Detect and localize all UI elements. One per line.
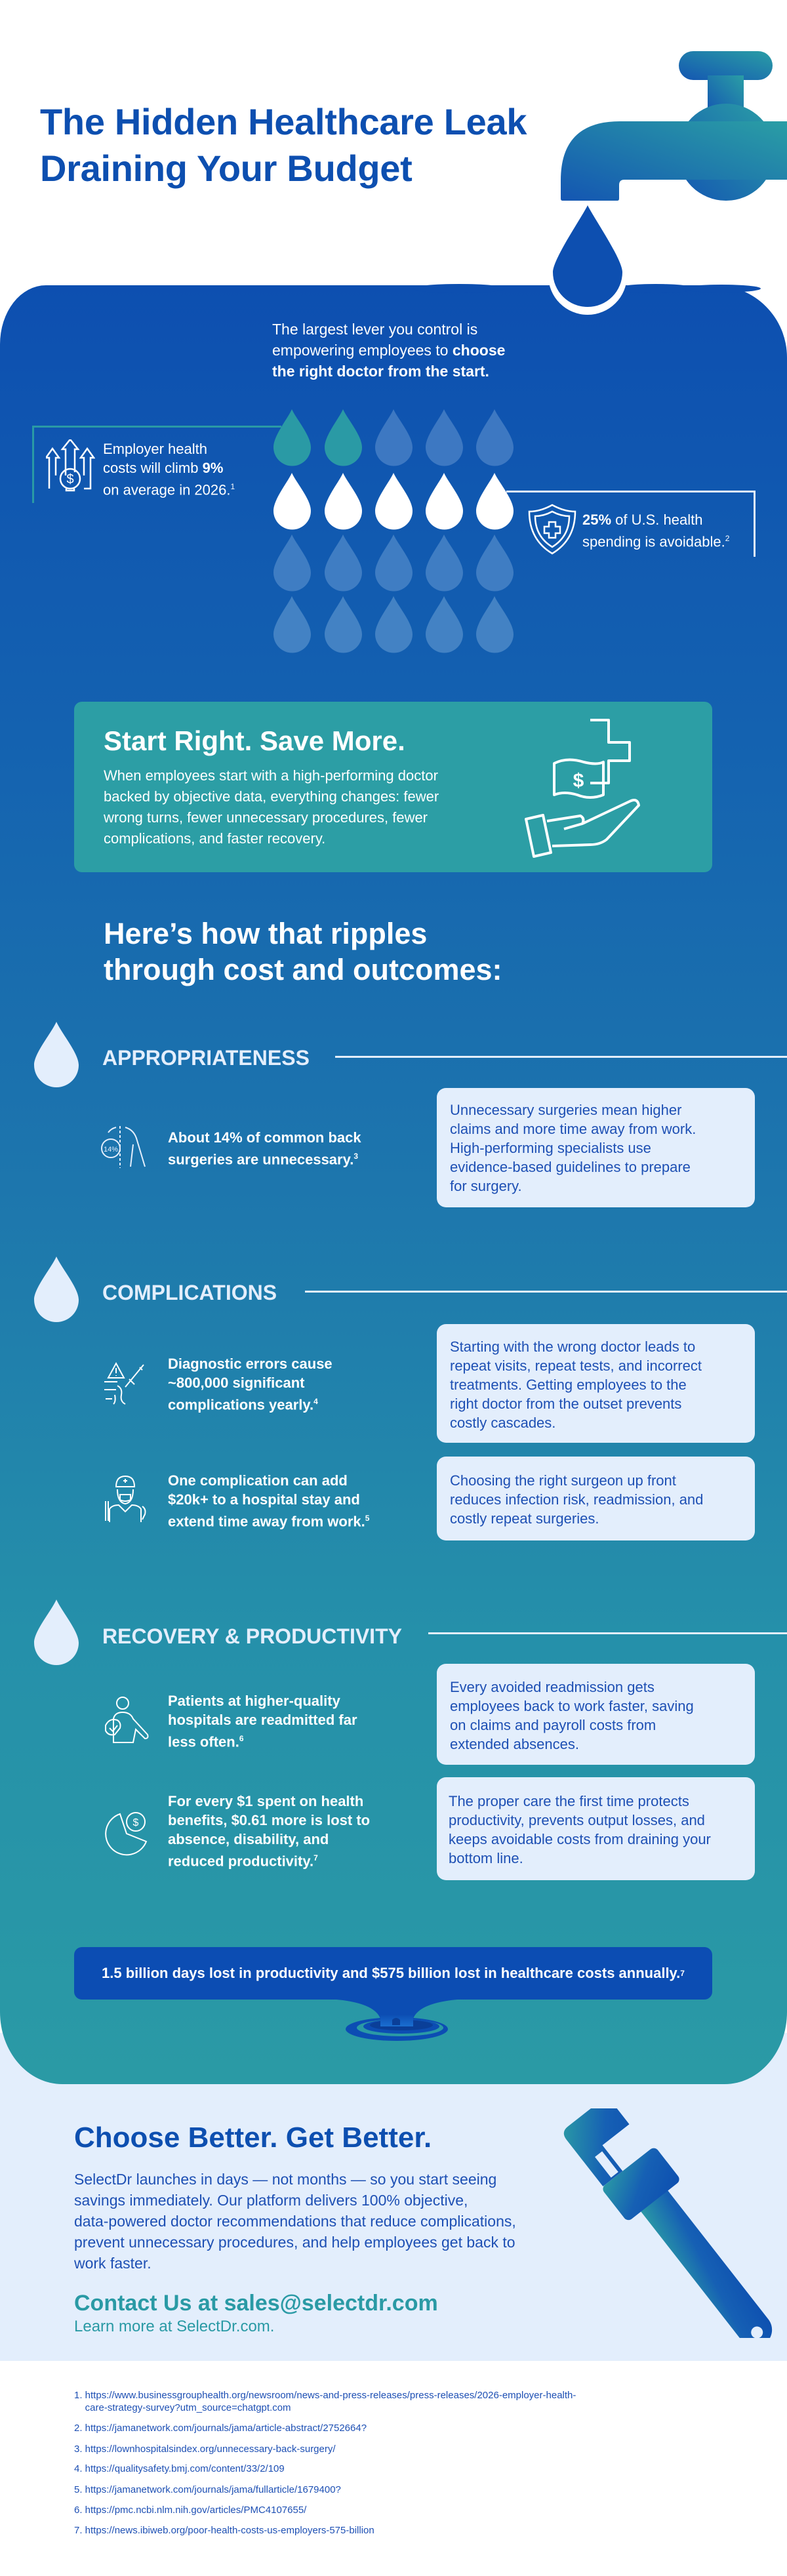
contact: Contact Us at sales@selectdr.com (74, 2291, 438, 2316)
text: One complication can add (168, 1472, 348, 1489)
heading: APPROPRIATENESS (102, 1046, 310, 1070)
text: Patients at higher-quality (168, 1693, 340, 1709)
box: readmission: on claims and payroll costs from (450, 1717, 656, 1733)
icon: clock with dollar (105, 1812, 147, 1856)
text: extend time away from work.5 (168, 1513, 369, 1529)
text (103, 441, 235, 498)
text (582, 512, 729, 550)
text: absence, disability, and (168, 1831, 329, 1847)
icon: hand with money (525, 719, 640, 858)
body: selectdr: prevent unnecessary procedures, and help employees get back to (74, 2234, 515, 2251)
box: surgeon: costly repeat surgeries. (450, 1510, 599, 1527)
banner: annual losses: 1.5 billion days lost in productivity and $575 billion lost in healthcare costs annually. (102, 1965, 680, 1981)
text: For every $1 spent on health (168, 1793, 363, 1809)
icon: wrench (564, 2108, 773, 2338)
body: complications, and faster recovery. (104, 830, 325, 847)
blue panel (0, 285, 787, 2084)
lever text (272, 321, 505, 380)
text: hospitals are readmitted far (168, 1712, 357, 1728)
stat: back surgeries (101, 1126, 361, 1168)
body: backed by objective data, everything changes: fewer (104, 788, 439, 805)
box: diagnostic: repeat visits, repeat tests, and incorrect (450, 1358, 702, 1374)
body: selectdr: work faster. (74, 2255, 151, 2272)
box: productivity: keeps avoidable costs from draining your (449, 1831, 711, 1847)
body: selectdr: data-powered doctor recommendations that reduce complications, (74, 2213, 516, 2230)
icon: clock with dollar: $ (133, 1817, 139, 1828)
text: Employer health (103, 441, 207, 457)
text (168, 1129, 361, 1167)
icon: drain (337, 2000, 457, 2041)
text: less often.6 (168, 1733, 244, 1750)
text: surgeries are unnecessary.3 (168, 1151, 358, 1167)
section: recovery (34, 1600, 787, 1665)
heading: ripples (104, 917, 502, 986)
box: productivity: The proper care the first time protects (449, 1793, 689, 1809)
text (168, 1472, 370, 1529)
icon: back (101, 1126, 146, 1168)
body: When employees start with a high-performing doctor (104, 767, 438, 784)
icon: back: 14% (104, 1146, 118, 1154)
icon: patient (105, 1697, 148, 1743)
heading: COMPLICATIONS (102, 1281, 277, 1304)
section: complications (34, 1257, 787, 1322)
references: 7. https://news.ibiweb.org/poor-health-costs-us-employers-575-billion (74, 2525, 374, 2536)
learn more: Learn more at SelectDr.com. (74, 2318, 274, 2335)
box: diagnostic (437, 1324, 755, 1443)
heading: ripples: Here’s how that ripples (104, 917, 427, 950)
lever text: empowering employees to choose (272, 342, 505, 359)
icon: drop (34, 1600, 79, 1665)
references: 6. https://pmc.ncbi.nlm.nih.gov/articles/PMC4107655/ (74, 2505, 306, 2516)
text: spending is avoidable.2 (582, 533, 729, 550)
banner: annual losses: 7 (680, 1969, 685, 1978)
text (168, 1693, 357, 1750)
text: benefits, $0.61 more is lost to (168, 1812, 370, 1828)
references (74, 2390, 576, 2536)
title: Draining Your Budget (40, 148, 412, 189)
box: readmission (437, 1664, 755, 1765)
box: productivity (437, 1777, 755, 1880)
box: appropriateness: Unnecessary surgeries mean higher (450, 1102, 681, 1118)
body: selectdr (74, 2171, 516, 2272)
box: appropriateness: for surgery. (450, 1178, 522, 1194)
box: surgeon (437, 1457, 755, 1540)
faucet and drip (426, 51, 787, 315)
box: readmission: employees back to work faster, saving (450, 1698, 694, 1714)
box: appropriateness: High-performing specialists use (450, 1140, 651, 1156)
stat: diagnostic errors (104, 1356, 333, 1413)
drops grid (273, 409, 514, 653)
box: readmission: extended absences. (450, 1736, 579, 1752)
text: reduced productivity.7 (168, 1853, 318, 1869)
lever text: the right doctor from the start. (272, 363, 489, 380)
callout: avoidable spending (506, 491, 756, 557)
text: $20k+ to a hospital stay and (168, 1491, 360, 1508)
box: appropriateness: evidence-based guidelines to prepare (450, 1159, 691, 1175)
heading: RECOVERY & PRODUCTIVITY (102, 1624, 402, 1648)
panel: choose better (0, 2033, 787, 2361)
panel: start right (74, 702, 712, 872)
icon: drop (34, 1257, 79, 1322)
stat: complication cost (105, 1472, 370, 1529)
box: appropriateness (437, 1088, 755, 1207)
icon: shield (529, 504, 576, 555)
text: costs will climb 9% (103, 460, 223, 476)
heading: ripples: through cost and outcomes: (104, 953, 502, 986)
references: 4. https://qualitysafety.bmj.com/content/33/2/109 (74, 2463, 285, 2474)
icon: surgeon (105, 1476, 146, 1522)
box: appropriateness: claims and more time away from work. (450, 1121, 696, 1137)
lever text: The largest lever you control is (272, 321, 477, 338)
icon: drop (34, 1022, 79, 1087)
text (168, 1793, 370, 1869)
title (40, 101, 527, 189)
text: complications yearly.4 (168, 1396, 318, 1413)
box: readmission: Every avoided readmission gets (450, 1679, 655, 1695)
stat: productivity loss (105, 1793, 370, 1869)
references: 1. https://www.businessgrouphealth.org/newsroom/news-and-press-releases/press-releases/2026-employer-health- (74, 2390, 576, 2401)
body: selectdr: SelectDr launches in days — not months — so you start seeing (74, 2171, 496, 2188)
box: productivity: bottom line. (449, 1850, 523, 1866)
text: on average in 2026.1 (103, 481, 235, 498)
body: wrong turns, fewer unnecessary procedures, fewer (104, 809, 428, 826)
body (104, 767, 439, 847)
callout: employer costs (32, 426, 281, 503)
text: 25% of U.S. health (582, 512, 702, 528)
references: 5. https://jamanetwork.com/journals/jama/fullarticle/1679400? (74, 2484, 341, 2495)
icon: warning & syringe (104, 1362, 144, 1405)
text: ~800,000 significant (168, 1375, 304, 1391)
body: selectdr: savings immediately. Our platform delivers 100% objective, (74, 2192, 468, 2209)
references: 2. https://jamanetwork.com/journals/jama/article-abstract/2752664? (74, 2423, 367, 2434)
box: productivity: productivity, prevents output losses, and (449, 1812, 705, 1828)
banner: annual losses (74, 1947, 712, 2000)
heading: Start Right. Save More. (104, 725, 405, 756)
title: The Hidden Healthcare Leak (40, 101, 527, 142)
icon: rising costs (46, 439, 95, 492)
text: About 14% of common back (168, 1129, 361, 1146)
stat: readmission (105, 1693, 357, 1750)
box: diagnostic: treatments. Getting employees to the (450, 1377, 687, 1393)
text: Diagnostic errors cause (168, 1356, 333, 1372)
heading: choose better: Choose Better. Get Better. (74, 2122, 432, 2154)
section: appropriateness (34, 1022, 787, 1087)
text (168, 1356, 333, 1413)
box: surgeon: Choosing the right surgeon up front (450, 1472, 676, 1489)
references: 3. https://lownhospitalsindex.org/unnecessary-back-surgery/ (74, 2444, 336, 2455)
box: diagnostic: right doctor from the outset prevents (450, 1396, 681, 1412)
references: care-strategy-survey?utm_source=chatgpt.com (85, 2402, 291, 2413)
icon: hand with money: $ (573, 770, 584, 792)
box: surgeon: reduces infection risk, readmission, and (450, 1491, 703, 1508)
box: diagnostic: costly cascades. (450, 1415, 555, 1431)
box: diagnostic: Starting with the wrong doctor leads to (450, 1338, 695, 1355)
icon: rising costs: $ (66, 472, 74, 487)
